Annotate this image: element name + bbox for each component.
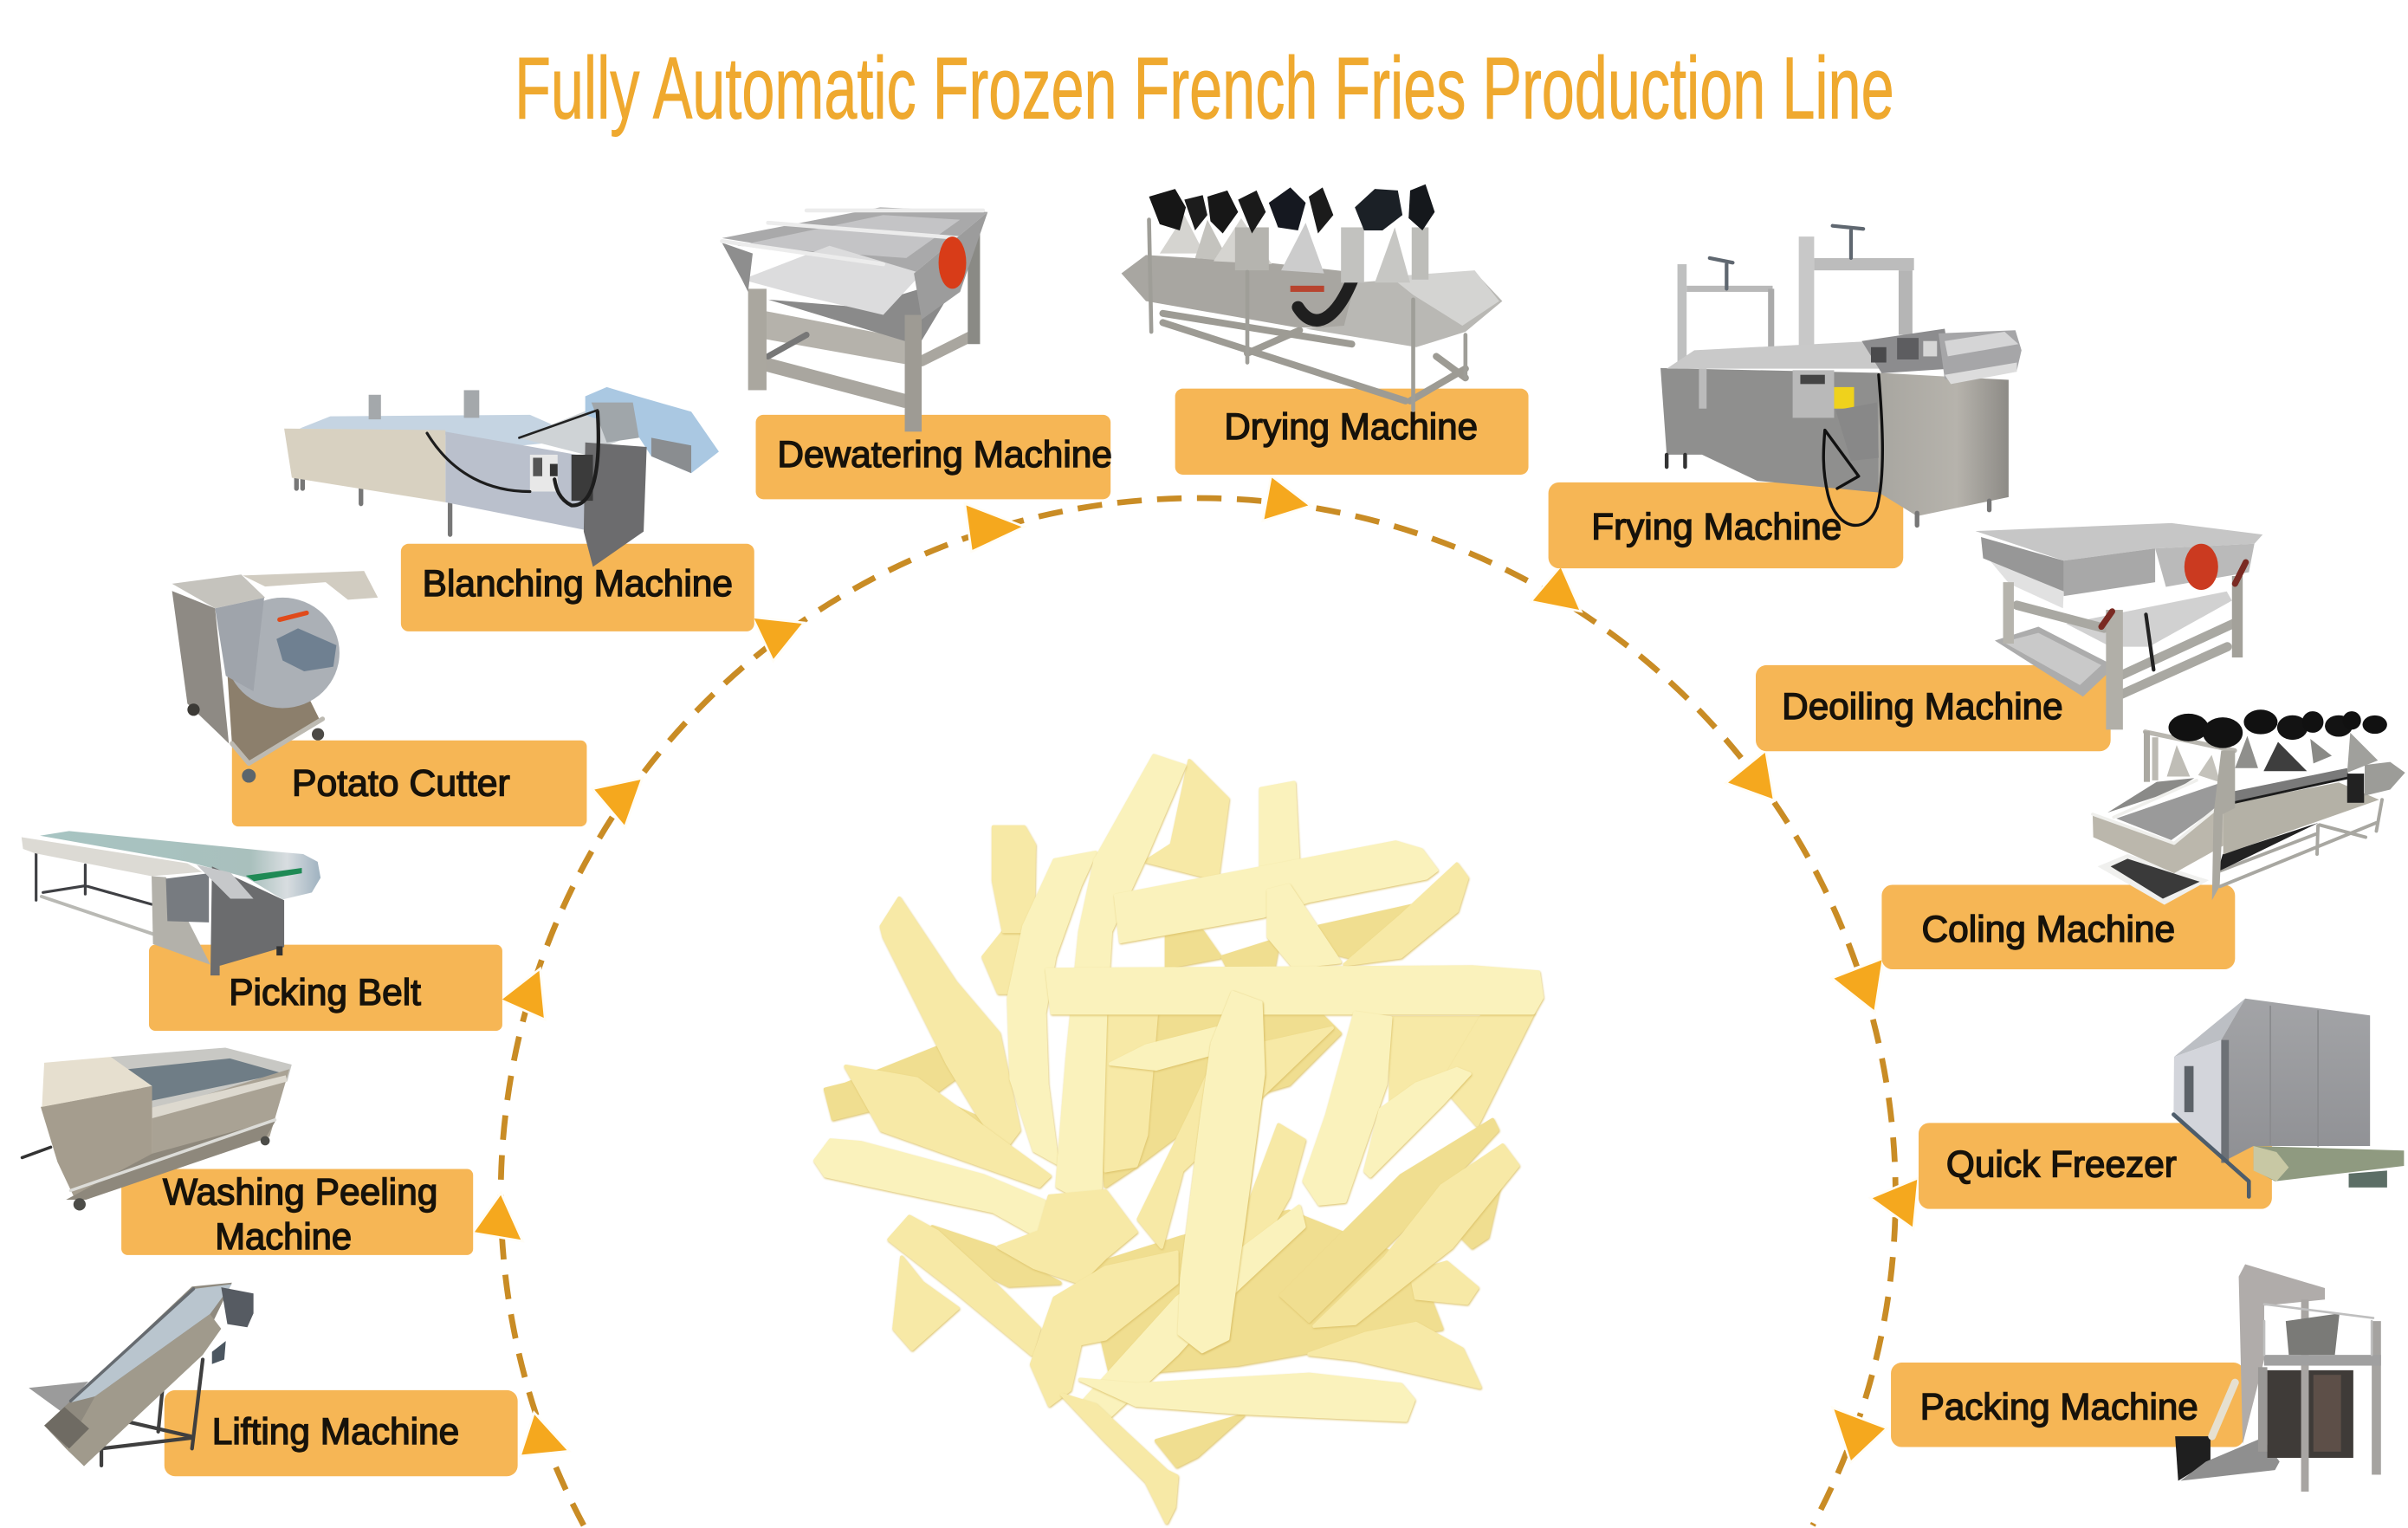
arrow: packing [1834,1409,1885,1460]
machine: cooling [2093,709,2405,905]
arrow: drying to frying [1265,478,1308,519]
label: Dewatering Machine [756,415,1112,499]
machine: deoiling [1976,523,2262,729]
label: Quick Freezer [1919,1123,2272,1209]
label: Picking Belt [149,945,502,1031]
dashed circular process path [501,498,1895,1525]
machine: drying [1122,185,1502,410]
machine: frying [1660,226,2022,526]
label: Packing Machine: Packing Machine [1920,1387,2198,1428]
machine: lifting conveyor [29,1283,254,1466]
process direction arrows [475,478,1917,1460]
label: Drying Machine: Drying Machine [1224,406,1478,448]
machine: dewatering [722,207,987,431]
arrow: dewatering to drying [966,505,1021,550]
label: Frying Machine: Frying Machine [1591,506,1842,547]
arrow: frying to deoiling [1533,567,1579,610]
label: Coling Machine: Coling Machine [1922,909,2175,950]
label: Packing Machine [1891,1363,2244,1447]
label: Frying Machine [1549,482,1903,568]
label: Deoiling Machine: Deoiling Machine [1782,686,2063,728]
label: Picking Belt: Picking Belt [229,972,421,1013]
label: Washing Peeling Machine: Washing Peeling [163,1171,437,1213]
arrow: blanching to dewatering [754,618,802,659]
label: Dewatering Machine: Dewatering Machine [777,434,1112,476]
arrow: washing to picking [475,1195,521,1240]
machine: picking belt [22,831,320,975]
machine: washing peeling [23,1047,292,1210]
label: Lifting Machine [165,1390,518,1476]
label: Lifting Machine: Lifting Machine [212,1411,459,1453]
arrow: picking to cutter [502,971,544,1018]
machine: quick freezer [2173,999,2404,1196]
label: Washing Peeling Machine [121,1169,473,1258]
machine: packing [2175,1265,2381,1492]
arrow: deoiling to cooling [1728,753,1773,799]
label: Drying Machine [1175,389,1529,475]
label: Potato Cutter [232,741,586,826]
arrow: cutter to blanching [594,780,641,825]
illustration: pile of frozen fries [815,755,1542,1522]
machine: potato cutter [172,571,378,783]
label: Quick Freezer: Quick Freezer [1946,1143,2177,1185]
arrow: freezer to packing [1873,1180,1917,1227]
machine: blanching [284,387,719,567]
label: Blanching Machine: Blanching Machine [423,563,733,605]
label: Blanching Machine [401,544,754,631]
label: Potato Cutter: Potato Cutter [292,763,510,805]
label: Washing Peeling Machine: Machine [215,1216,352,1258]
arrow: lifting to washing [521,1415,566,1454]
label: Coling Machine [1881,884,2235,969]
arrow: cooling to freezer [1834,960,1881,1010]
label: Deoiling Machine [1756,665,2111,751]
